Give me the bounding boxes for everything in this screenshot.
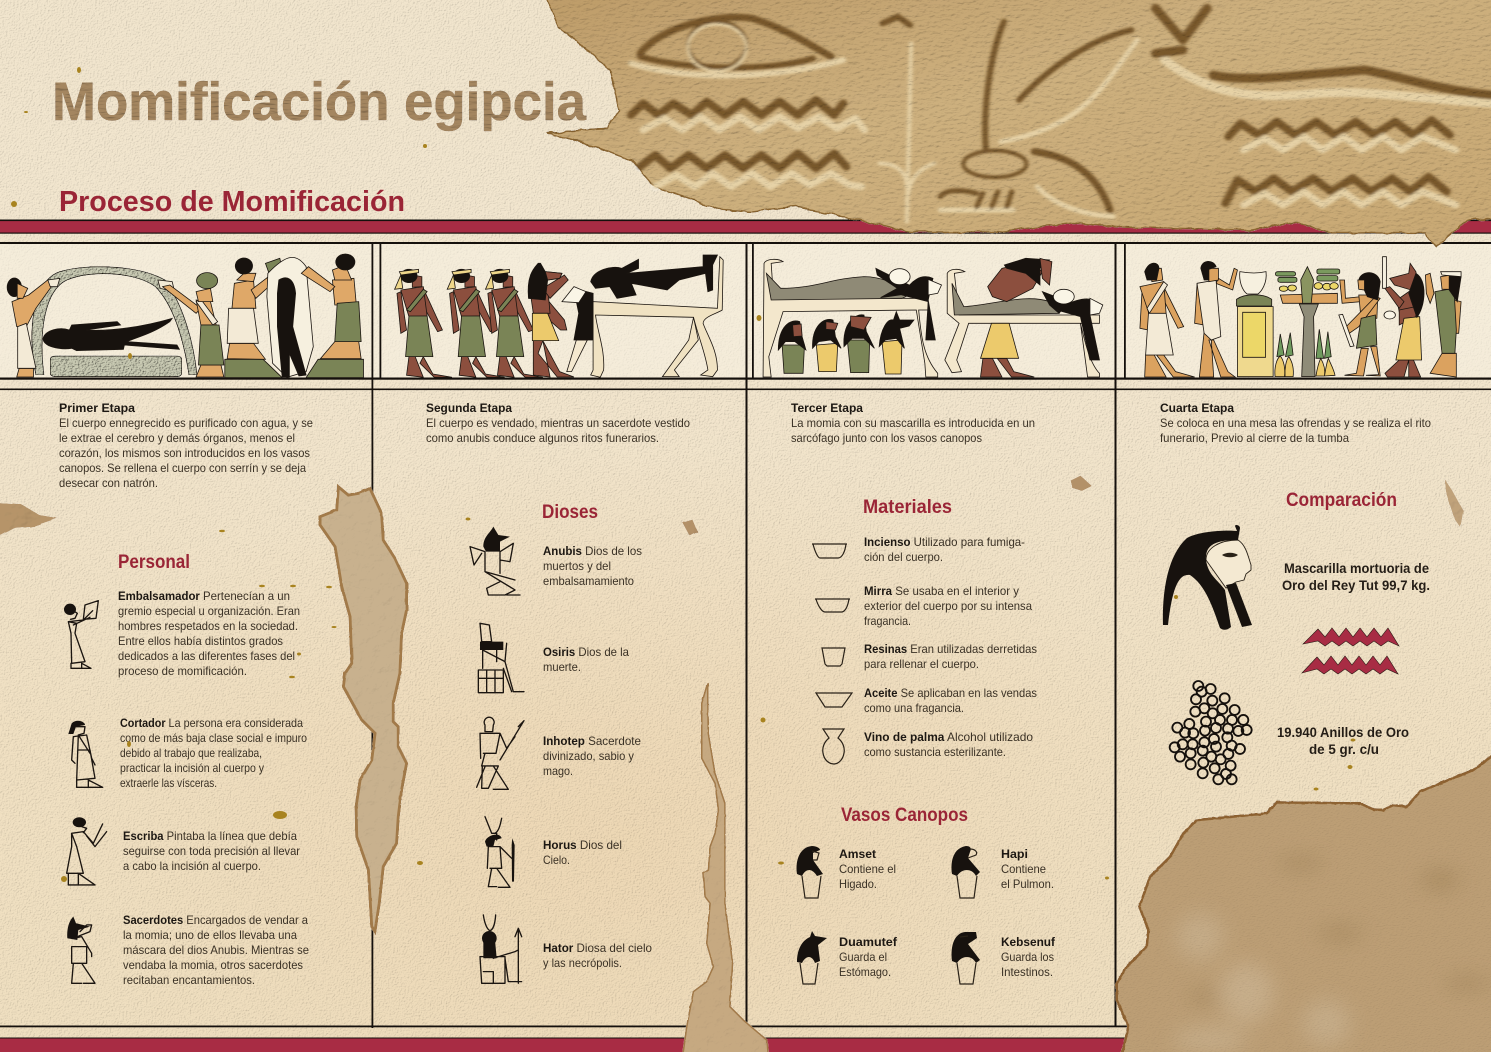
god: Hator text — [543, 942, 652, 970]
personal: Escriba text: a cabo la incisión al cuerpo. — [123, 860, 261, 873]
frieze panel 3: sarcophagus and canopic jars — [763, 258, 1103, 377]
icon: scribe — [67, 817, 107, 885]
carved water lines, left — [631, 100, 864, 187]
stage 4 text: funerario, Previo al cierre de la tumba — [1160, 432, 1350, 445]
personal: Cortador text: extraerle las vísceras. — [120, 777, 217, 790]
canopic jar: Duamutef — [797, 931, 898, 984]
stage 1 text: Primer Etapa — [59, 401, 135, 415]
god: Osiris text — [543, 646, 630, 674]
god: Anubis text — [543, 545, 642, 588]
personal: Sacerdotes text — [123, 914, 309, 987]
material: Mirra: Mirra Se usaba en el interior y — [864, 585, 1019, 598]
canopic jar: Duamutef: Duamutef — [839, 935, 898, 949]
god: Anubis text: Anubis Dios de los — [543, 545, 642, 558]
personal: Cortador text: practicar la incisión al cuerpo y — [120, 762, 264, 775]
personal: Sacerdotes text: vendaba la momia, otros sacerdotes — [123, 959, 303, 972]
frame lines — [0, 242, 1491, 1039]
comparison text: mask: Mascarilla mortuoria de — [1284, 561, 1429, 576]
material: Mirra — [815, 585, 1033, 628]
section heading: Vasos Canopos: Vasos Canopos — [841, 805, 968, 826]
canopic jar: Kebsenuf: Guarda los — [1001, 951, 1054, 964]
god: Inhotep text: divinizado, sabio y — [543, 750, 634, 763]
god: Inhotep text — [543, 735, 641, 778]
material: Aceite — [816, 687, 1037, 715]
icon: water zigzags — [1302, 628, 1399, 674]
canopic jar: Hapi — [952, 846, 1054, 898]
personal: Sacerdotes text: Sacerdotes Encargados de vendar a — [123, 914, 309, 927]
material: Incienso: Incienso Utilizado para fumiga- — [864, 536, 1025, 549]
stage 2 text: como anubis conduce algunos ritos funerarios. — [426, 432, 659, 445]
canopic jar: Hapi: Hapi — [1001, 847, 1028, 861]
canopic jar: Hapi: Contiene — [1001, 863, 1046, 876]
stage 1 text: El cuerpo ennegrecido es purificado con agua, y se — [59, 417, 313, 430]
material: Resinas: Resinas Eran utilizadas derretidas — [864, 643, 1037, 656]
personal: Embalsamador text: Embalsamador Pertenecían a un — [118, 590, 290, 603]
material: Incienso — [812, 536, 1025, 564]
personal: Escriba text: seguirse con toda precisión al llevar — [123, 845, 300, 858]
section heading: process: Proceso de Momificación — [59, 186, 405, 218]
icon: cutter — [68, 721, 103, 787]
god: Horus text — [543, 839, 622, 867]
personal: Cortador text: como de más baja clase social e impuro — [120, 732, 307, 745]
material: Mirra: fragancia. — [864, 615, 911, 628]
stage 4 text — [1160, 401, 1431, 445]
stage 1 text: canopos. Se rellena el cuerpo con serrín y se deja — [59, 462, 307, 475]
god: Horus text: Horus Dios del — [543, 839, 622, 852]
stage 2 text — [426, 401, 690, 445]
personal: Embalsamador text: dedicados a las diferentes fases del — [118, 650, 295, 663]
canopic jar: Amset — [797, 846, 896, 898]
personal: Sacerdotes text: recitaban encantamientos. — [123, 974, 255, 987]
personal: Escriba text: Escriba Pintaba la línea que debía — [123, 830, 298, 843]
canopic jar: Amset: Higado. — [839, 878, 877, 891]
stone relief: bottom right — [1117, 750, 1491, 1052]
icon: gold rings — [1170, 681, 1252, 784]
section heading: Dioses: Dioses — [542, 502, 598, 523]
material: Mirra: exterior del cuerpo por su intensa — [864, 600, 1033, 613]
god: Hator text: Hator Diosa del cielo — [543, 942, 652, 955]
stage 3 text: sarcófago junto con los vasos canopos — [791, 432, 982, 445]
carved water lines and curve, right — [1156, 8, 1491, 205]
comparison text: rings: 19.940 Anillos de Oro — [1277, 725, 1409, 740]
god: Horus text: Cielo. — [543, 854, 570, 867]
material: Resinas: para rellenar el cuerpo. — [864, 658, 979, 671]
personal: Cortador text: debido al trabajo que realizaba, — [120, 747, 262, 760]
torn patch: center column — [682, 683, 768, 1052]
personal: Cortador text — [120, 717, 307, 790]
frieze panel 2: bandaging with Anubis — [395, 255, 723, 377]
god: Anubis text: embalsamamiento — [543, 575, 634, 588]
canopic jar: Duamutef: Guarda el — [839, 951, 887, 964]
stage 3 text: Tercer Etapa — [791, 401, 863, 415]
carved plant and wing — [880, 17, 1137, 222]
personal: Escriba text — [123, 830, 300, 873]
comparison text: mask: Oro del Rey Tut 99,7 kg. — [1282, 578, 1430, 593]
section heading: Personal: Personal — [118, 552, 190, 573]
comparison text: rings: de 5 gr. c/u — [1309, 742, 1379, 757]
god: Anubis text: muertos y del — [543, 560, 611, 573]
personal: Embalsamador text: gremio especial u organización. Eran — [118, 605, 300, 618]
god: Osiris text: Osiris Dios de la — [543, 646, 630, 659]
canopic jar: Kebsenuf: Kebsenuf — [1001, 935, 1056, 949]
frieze panel 1: washing the body — [7, 254, 364, 378]
personal: Embalsamador text — [118, 590, 300, 678]
stage 2 text: Segunda Etapa — [426, 401, 512, 415]
carved eye — [631, 17, 843, 75]
stage 3 text: La momia con su mascarilla es introducida en un — [791, 417, 1035, 430]
personal: Embalsamador text: Entre ellos había distintos grados — [118, 635, 283, 648]
icon: priest — [67, 917, 95, 983]
stage 1 text — [59, 401, 313, 490]
icon: Inhotep — [477, 717, 524, 789]
icon: Horus — [485, 817, 515, 887]
top crimson band — [0, 220, 1491, 234]
material: Resinas — [822, 643, 1037, 671]
icon: Osiris — [478, 623, 524, 693]
material: Vino de palma — [823, 729, 1033, 764]
stage 4 text: Cuarta Etapa — [1160, 401, 1234, 415]
material: Aceite: como una fragancia. — [864, 702, 964, 715]
canopic jar: Duamutef: Estómago. — [839, 966, 891, 979]
stage 2 text: El cuerpo es vendado, mientras un sacerdote vestido — [426, 417, 690, 430]
canopic jar: Amset: Amset — [839, 847, 876, 861]
small stains — [683, 475, 1463, 536]
god: Inhotep text: mago. — [543, 765, 573, 778]
frieze panel 4: offerings and funerary rite — [1140, 257, 1461, 377]
icon: death mask — [1163, 525, 1252, 630]
torn patch: left column — [320, 487, 407, 932]
personal: Sacerdotes text: máscara del dios Anubis. Mientras se — [123, 944, 309, 957]
icon: Anubis — [470, 527, 520, 595]
icon: Hator — [480, 915, 522, 983]
icon: embalmer — [64, 601, 98, 668]
stage 3 text — [791, 401, 1035, 445]
canopic jar: Amset: Contiene el — [839, 863, 896, 876]
gold flecks — [11, 67, 1356, 882]
personal: Embalsamador text: hombres respetados en la sociedad. — [118, 620, 298, 633]
bottom crimson band — [0, 1038, 1491, 1052]
material: Incienso: ción del cuerpo. — [864, 551, 943, 564]
personal: Cortador text: Cortador La persona era considerada — [120, 717, 304, 730]
god: Hator text: y las necrópolis. — [543, 957, 622, 970]
section heading: Materiales: Materiales — [863, 497, 952, 518]
canopic jar: Hapi: el Pulmon. — [1001, 878, 1054, 891]
stage 4 text: Se coloca en una mesa las ofrendas y se realiza el rito — [1160, 417, 1431, 430]
title: Momificación egipcia — [52, 72, 587, 132]
personal: Embalsamador text: proceso de momificación. — [118, 665, 247, 678]
personal: Sacerdotes text: la momia; uno de ellos llevaba una — [123, 929, 298, 942]
comparison text: rings — [1277, 725, 1409, 757]
canopic jar: Kebsenuf: Intestinos. — [1001, 966, 1053, 979]
material: Vino de palma: Vino de palma Alcohol utilizado — [864, 731, 1033, 744]
section heading: Comparación: Comparación — [1286, 490, 1397, 511]
god: Inhotep text: Inhotep Sacerdote — [543, 735, 641, 748]
frieze band background — [0, 244, 1491, 378]
stage 1 text: le extrae el cerebro y demás órganos, menos el — [59, 432, 295, 445]
stain: left torn patch — [0, 503, 58, 540]
material: Aceite: Aceite Se aplicaban en las vendas — [864, 687, 1037, 700]
material: Vino de palma: como sustancia esterilizante. — [864, 746, 1006, 759]
stage 1 text: desecar con natrón. — [59, 477, 158, 490]
god: Osiris text: muerte. — [543, 661, 581, 674]
canopic jar: Kebsenuf — [952, 932, 1056, 984]
comparison text: mask — [1282, 561, 1430, 593]
stone relief: top with carved hieroglyphs — [536, 0, 1491, 247]
stage 1 text: corazón, los mismos son introducidos en los vasos — [59, 447, 310, 460]
